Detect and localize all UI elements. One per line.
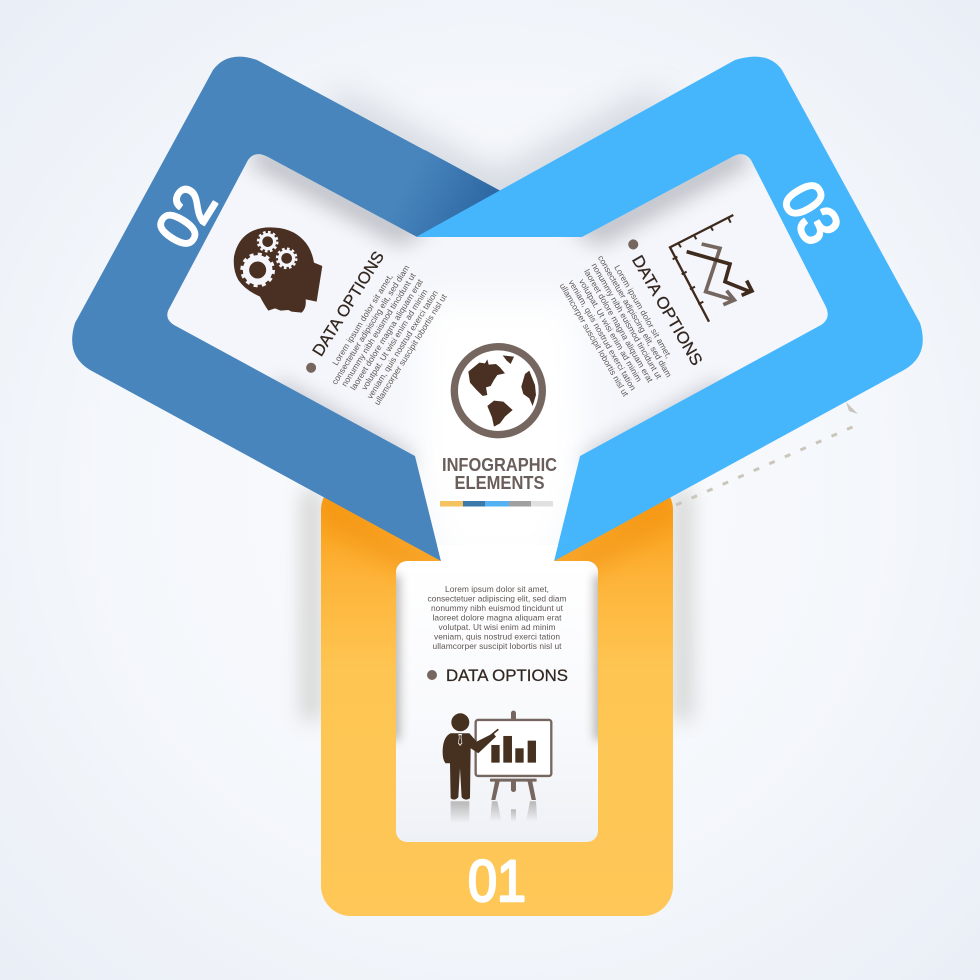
panel: central white window <box>167 140 828 575</box>
number 01: 01 <box>468 849 526 914</box>
lorem paragraph 01: volutpat. Ut wisi enim ad minim <box>438 622 556 632</box>
lorem paragraph 02: Lorem ipsum dolor sit amet, <box>330 272 395 367</box>
dashed arrow <box>676 402 858 505</box>
lorem paragraph 01 <box>428 584 567 651</box>
icon: line chart <box>670 215 752 322</box>
lorem paragraph 02 <box>321 258 451 411</box>
bars <box>491 736 536 763</box>
icon: head with gears <box>234 227 322 313</box>
panel: 03 light blue <box>416 57 923 561</box>
lorem paragraph 02: nonummy nibh euismod tincidunt ut <box>339 270 418 388</box>
icon: globe <box>454 347 542 435</box>
lorem paragraph 01: ullamcorper suscipit lobortis nisl ut <box>432 641 562 651</box>
number 02: 02 <box>143 174 230 259</box>
soft background shadows <box>302 95 692 720</box>
bullet 01 <box>427 670 437 680</box>
lorem paragraph 03: ullamcorper suscipit lobortis nisl ut <box>558 281 631 399</box>
lorem paragraph 01: nonummy nibh euismod tincidunt ut <box>431 603 564 613</box>
lorem paragraph 03: nonummy nibh euismod tincidunt ut <box>590 261 664 381</box>
title <box>442 454 557 493</box>
board <box>476 711 551 800</box>
number 03: 03 <box>768 171 854 255</box>
window: 01 <box>386 561 608 842</box>
panel: 01 orange <box>321 480 673 916</box>
title: ELEMENTS <box>454 472 544 493</box>
lorem paragraph 01: consectetuer adipiscing elit, sed diam <box>428 594 567 604</box>
lorem paragraph 01: Lorem ipsum dolor sit amet, <box>445 584 549 594</box>
lorem paragraph 03: veniam, quis nostrud exerci tation <box>567 278 638 392</box>
heading: data options 01: DATA OPTIONS <box>446 667 568 685</box>
lorem paragraph 02: veniam, quis nostrud exerci tation <box>365 288 440 401</box>
lorem paragraph 01: veniam, quis nostrud exerci tation <box>434 632 560 642</box>
lorem paragraph 03: laoreet dolore magna aliquam erat <box>582 267 656 385</box>
text block: 03 <box>555 236 706 405</box>
lorem paragraph 02: laoreet dolore magna aliquam erat <box>348 277 425 392</box>
presenter figure <box>443 713 498 800</box>
heading: data options 03: DATA OPTIONS <box>628 252 706 369</box>
lorem paragraph 03: Lorem ipsum dolor sit amet, <box>612 263 674 360</box>
lorem paragraph 03: volutpat. Ut wisi enim ad minim <box>577 277 644 383</box>
bullet 02 <box>304 361 318 375</box>
lorem paragraph 02: consectetuer adipiscing elit, sed diam <box>329 263 411 386</box>
bullet 03 <box>626 238 640 251</box>
colour bar <box>440 501 553 506</box>
panel: 02 dark blue <box>72 57 510 561</box>
lorem paragraph 03 <box>555 249 682 402</box>
lorem paragraph 02: ullamcorper suscipit lobortis nisl ut <box>372 292 449 407</box>
reflection <box>451 801 537 823</box>
lorem paragraph 02: volutpat. Ut wisi enim ad minim <box>359 287 430 392</box>
text block: 02 <box>299 245 451 414</box>
text block: 01 <box>427 584 568 685</box>
icon: presenter at board <box>443 711 551 823</box>
lorem paragraph 01: laoreet dolore magna aliquam erat <box>432 612 562 622</box>
lorem paragraph 03: consectetuer adipiscing elit, sed diam <box>596 254 674 379</box>
title: INFOGRAPHIC <box>442 454 557 475</box>
heading: data options 02: DATA OPTIONS <box>309 248 388 360</box>
